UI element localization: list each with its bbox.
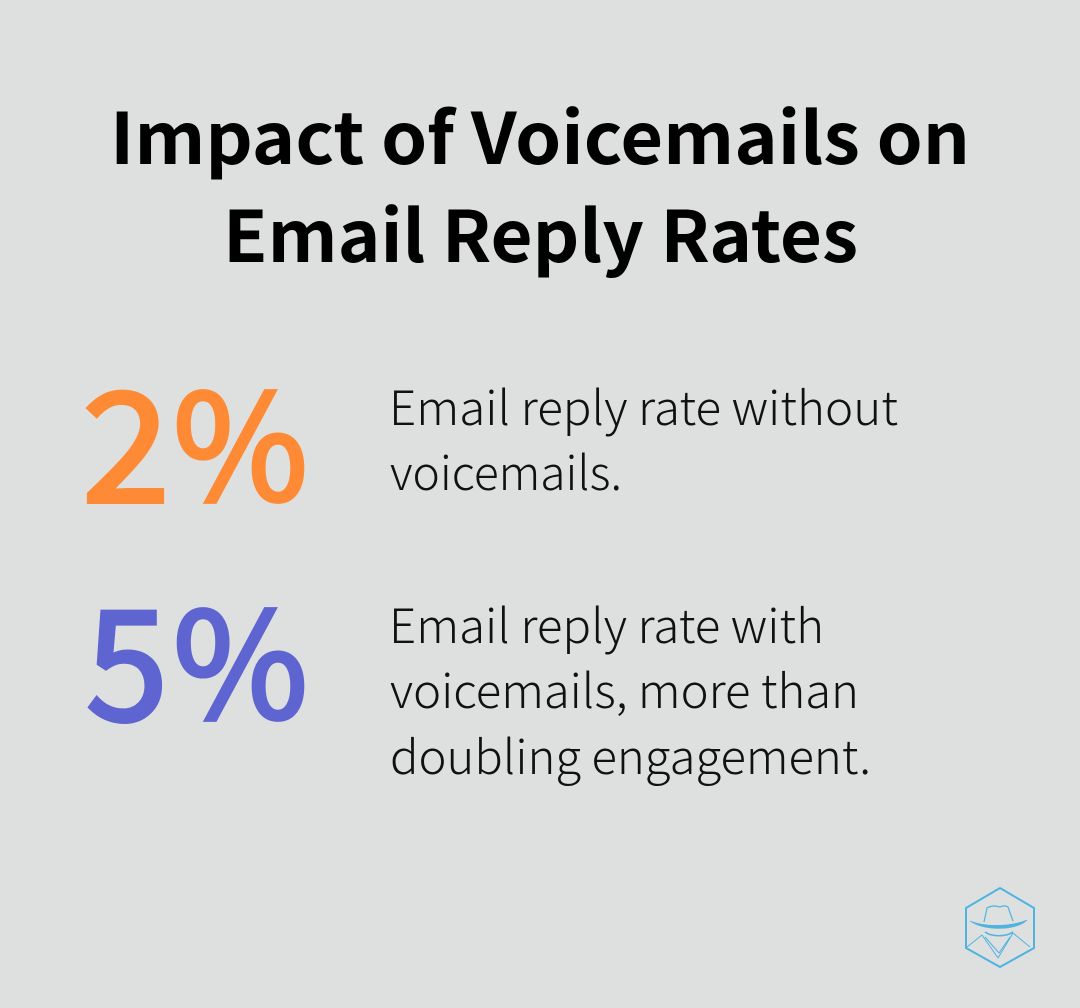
stat: 2%: 2 [82,326,170,546]
stat: 5%: 5 [86,544,168,764]
text: without voicemails: Email reply rate without [389,370,898,439]
text: with voicemails: Email reply rate with [389,588,824,657]
stat: 2% [82,326,308,546]
stat: 2%: % [173,332,308,543]
text: with voicemails: voicemails, more than [390,653,859,722]
title: Impact of Voicemails on [110,83,970,185]
stat: 5% [86,544,308,764]
text: without voicemails: voicemails. [390,435,622,504]
stat: 5%: % [173,550,308,761]
icon: hexagon spy logo [966,888,1034,967]
title [110,83,970,283]
title: Email Reply Rates [223,181,858,283]
text: with voicemails: doubling engagement. [390,719,871,788]
text: with voicemails [389,588,871,788]
text: without voicemails [389,370,898,504]
